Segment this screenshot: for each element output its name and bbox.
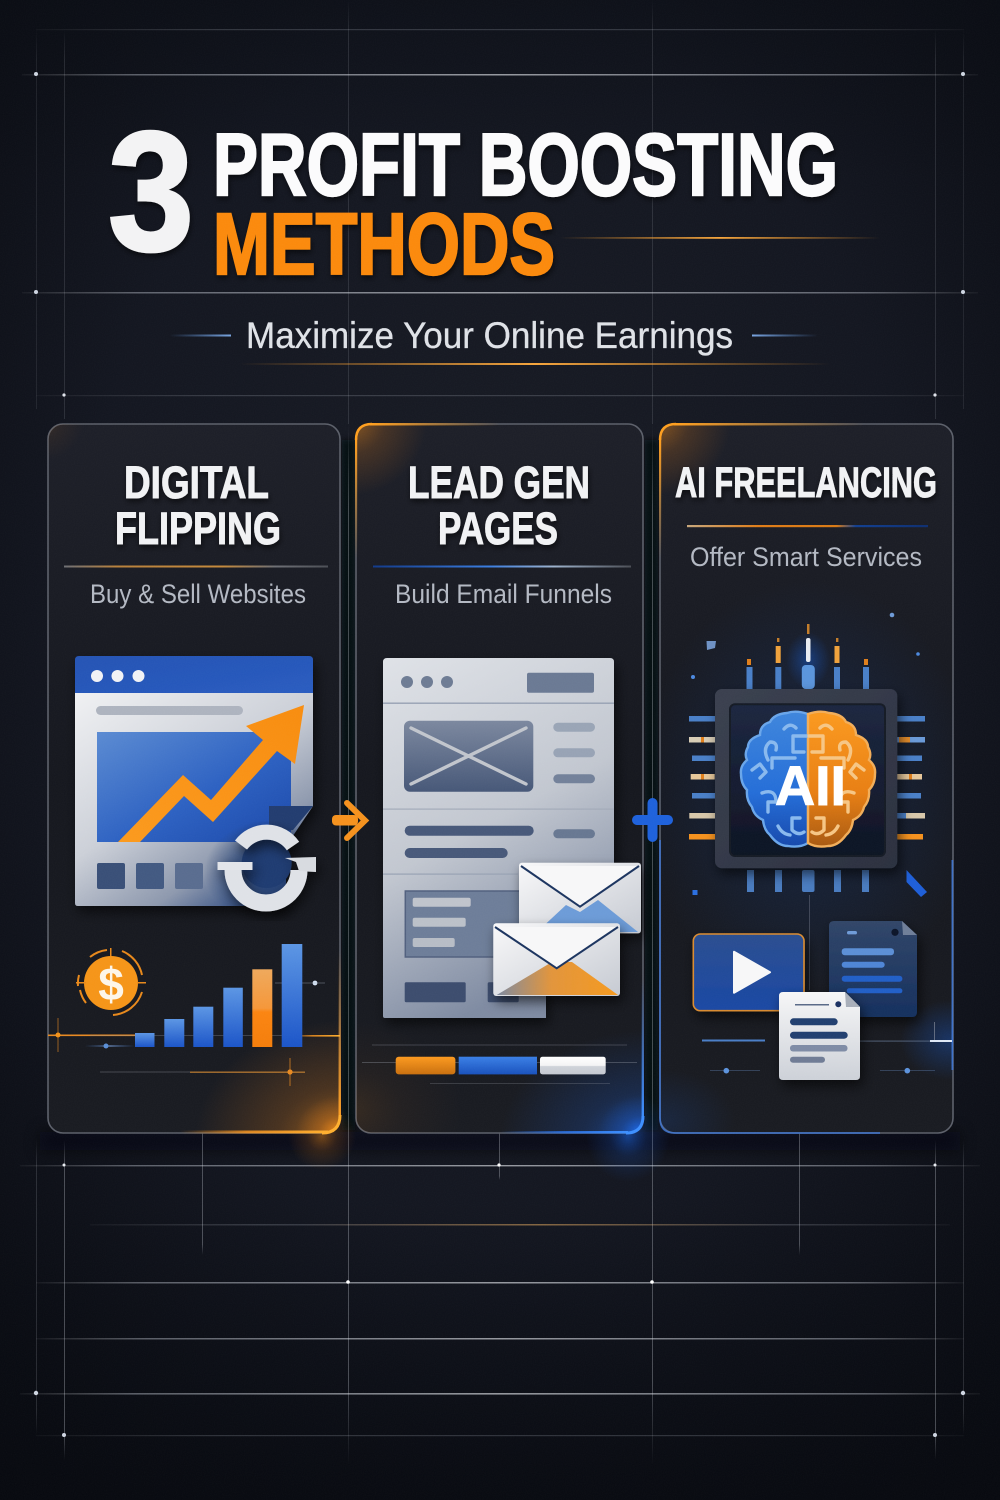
panel: lead gen pages [354, 422, 644, 1134]
heading [408, 457, 590, 554]
title line two: METHODS [213, 196, 555, 293]
lines behind chart [48, 981, 340, 1086]
icon: front envelope [493, 923, 620, 996]
orange accent line [560, 237, 880, 239]
subheading: Build Email Funnels [395, 579, 612, 609]
bar chart [135, 944, 302, 1047]
icon: brain [741, 712, 875, 847]
heading: DIGITAL [124, 457, 269, 508]
icon: dark document [829, 921, 917, 1017]
icon: brain: AII [775, 754, 846, 817]
icon: white document [779, 992, 860, 1080]
heading: LEAD GEN [408, 457, 590, 508]
subheading: Offer Smart Services [690, 542, 922, 572]
chip pins right [897, 716, 925, 840]
title numeral: 3 [108, 97, 194, 287]
title [108, 97, 880, 293]
chip sparkles [691, 613, 927, 897]
subtitle: Maximize Your Online Earnings [246, 315, 733, 356]
heading: PAGES [438, 503, 558, 554]
arrow between panels [332, 803, 365, 838]
panel: ai freelancing [658, 422, 954, 1134]
icon: video player [693, 934, 804, 1011]
icon: ai chip [689, 613, 927, 897]
icon: dollar coin [76, 948, 146, 1015]
icon: browser window with growth arrow [75, 656, 340, 924]
plus connector [637, 803, 668, 837]
chip pins left [689, 716, 715, 840]
heading: FLIPPING [115, 503, 281, 554]
subheading: Buy & Sell Websites [90, 579, 306, 609]
progress bar [362, 1044, 637, 1084]
divider [373, 566, 631, 568]
icon: landing page mockup [383, 658, 614, 1018]
chip pins top [746, 624, 869, 689]
icon: refresh arrows [218, 832, 316, 903]
heading [115, 457, 281, 554]
chip body [715, 689, 897, 868]
decorative lines [702, 895, 952, 1073]
icon: back envelope [519, 863, 641, 933]
icon: dollar coin: $ [98, 958, 124, 1010]
glow under cards [288, 1090, 670, 1182]
panel: digital flipping [47, 423, 342, 1134]
divider [64, 566, 328, 568]
chip pins bottom [747, 870, 869, 892]
divider [687, 525, 928, 527]
